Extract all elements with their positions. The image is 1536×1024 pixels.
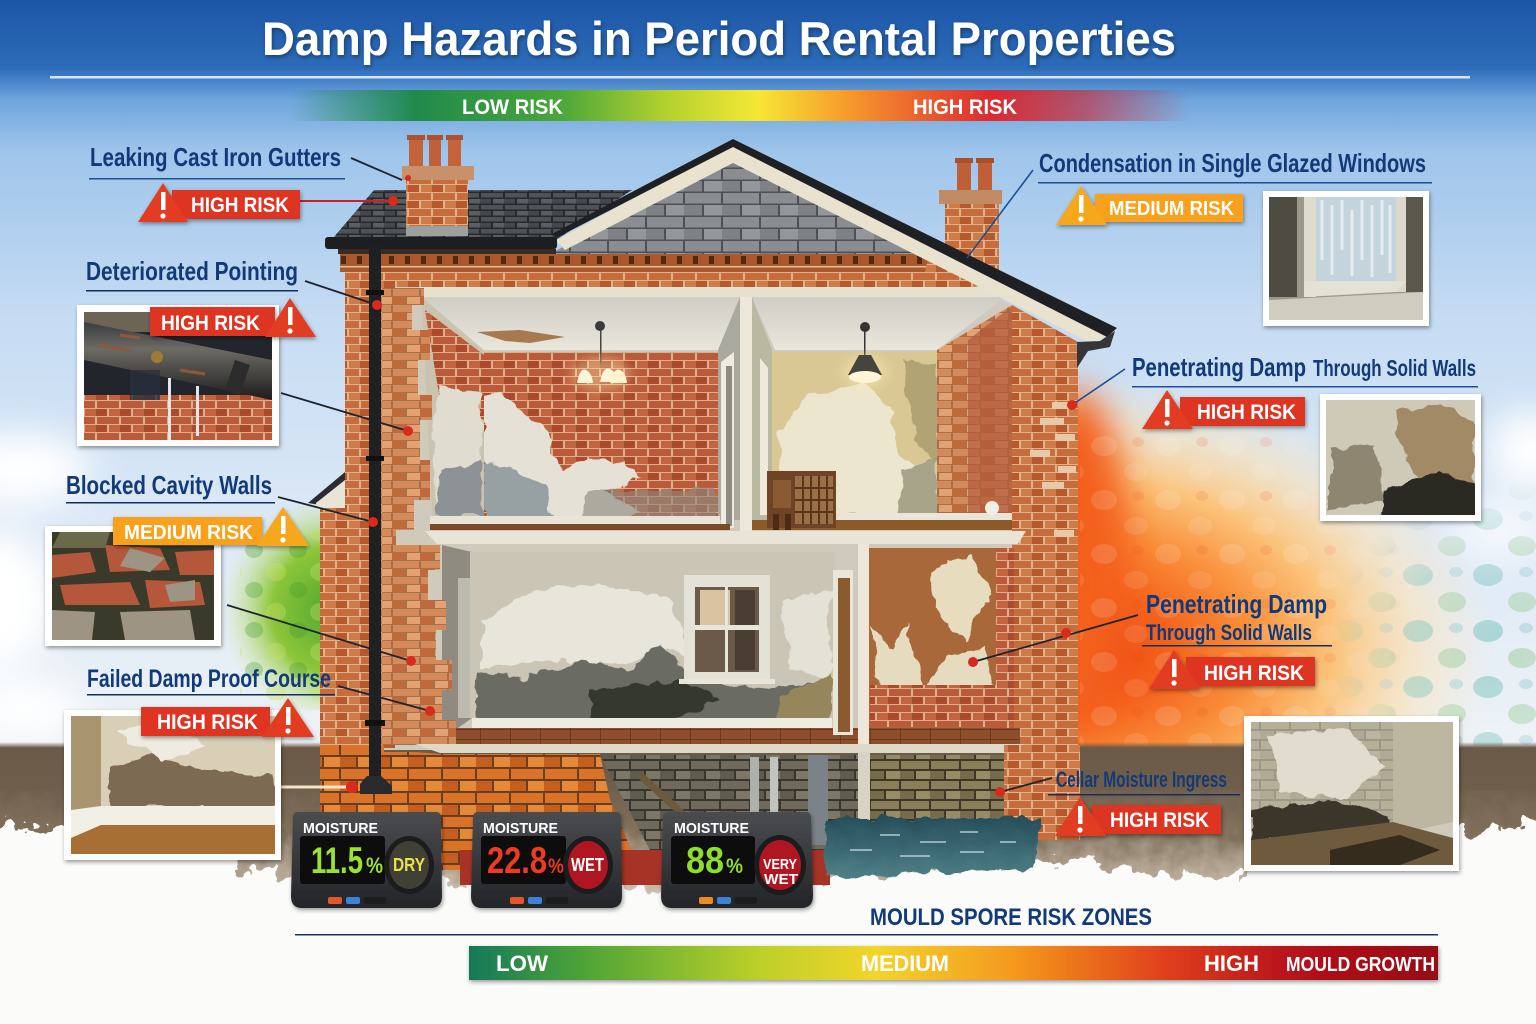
moisture meter: dry: DRY bbox=[393, 855, 425, 875]
badge: high risk penetrating lower: HIGH RISK bbox=[1204, 662, 1304, 685]
gable fascia bbox=[556, 145, 1106, 346]
brick frieze bbox=[345, 250, 990, 287]
photo: cellar corner bbox=[1244, 716, 1459, 871]
upper right room bbox=[752, 297, 1012, 530]
badge: high risk: HIGH RISK bbox=[191, 194, 289, 217]
moisture meter: very wet: VERY bbox=[763, 856, 797, 873]
door upper left bbox=[721, 352, 734, 528]
badge: high risk pointing bbox=[150, 298, 316, 337]
right chimney bbox=[939, 158, 1002, 272]
cellar bbox=[320, 745, 1080, 885]
gable slate bbox=[550, 155, 925, 254]
roof edge bbox=[552, 139, 1117, 337]
right exterior wall bbox=[1005, 305, 1078, 830]
badge: high risk pointing: HIGH RISK bbox=[161, 312, 260, 335]
moisture meter: dry: 11.5 bbox=[311, 840, 363, 881]
moisture meter: wet: 22.8 bbox=[487, 840, 547, 881]
label: condensation bbox=[1038, 148, 1432, 225]
moisture meter: very wet bbox=[661, 812, 813, 908]
label: leaking cast iron gutters bbox=[89, 142, 345, 222]
heading rule bbox=[295, 934, 1438, 936]
mould spore risk bar: HIGH bbox=[1204, 951, 1259, 976]
badge: high risk penetrating upper: HIGH RISK bbox=[1197, 401, 1296, 424]
upper lintel bbox=[420, 287, 998, 297]
badge: high risk cellar: HIGH RISK bbox=[1110, 809, 1209, 832]
title rule bbox=[50, 76, 1470, 78]
photo: cast iron pipe bbox=[77, 305, 279, 446]
moisture meter: very wet: MOISTURE bbox=[674, 820, 749, 837]
moisture meter: very wet: % bbox=[726, 855, 743, 878]
badge: high risk cellar bbox=[1055, 797, 1221, 836]
moisture meter: very wet: 88 bbox=[686, 840, 724, 881]
label: cellar moisture ingress bbox=[1048, 767, 1240, 836]
badge: medium risk condensation: MEDIUM RISK bbox=[1109, 198, 1235, 220]
moisture meter: very wet: WET bbox=[764, 871, 798, 888]
label: penetrating damp lower: Through Solid Walls bbox=[1146, 620, 1312, 645]
label: penetrating damp lower bbox=[1142, 589, 1332, 689]
left extension bbox=[308, 472, 360, 748]
upper left room bbox=[422, 297, 740, 530]
left slate roof bbox=[333, 190, 632, 240]
moisture meter: dry bbox=[291, 812, 442, 908]
photo: damaged plaster bbox=[1320, 394, 1481, 521]
label: cellar moisture ingress: Cellar Moisture Ingress bbox=[1056, 767, 1227, 792]
moisture meter: dry: % bbox=[366, 853, 383, 878]
badge: high risk damp proof: HIGH RISK bbox=[157, 711, 258, 734]
window bbox=[679, 575, 775, 684]
crumbling brick edge bbox=[382, 288, 456, 745]
mould spore risk bar: MEDIUM bbox=[861, 951, 949, 976]
right fascia tail bbox=[1077, 331, 1115, 368]
label: penetrating damp lower: Penetrating Damp bbox=[1146, 589, 1327, 619]
label: penetrating damp upper: Penetrating Damp bbox=[1132, 352, 1306, 382]
mould spore risk bar: LOW bbox=[496, 951, 548, 976]
label: leaking cast iron gutters: Leaking Cast Iron Gutters bbox=[90, 142, 341, 172]
background: sky bbox=[0, 0, 1536, 760]
top risk scale: LOW RISK bbox=[462, 96, 563, 119]
photo: damp room bbox=[64, 710, 281, 860]
badge: high risk damp proof bbox=[141, 698, 314, 737]
leader lines and dots bbox=[227, 158, 1138, 797]
moisture meter: wet: % bbox=[548, 855, 564, 878]
heat zone: right of house bbox=[1020, 380, 1536, 752]
label: failed damp proof course: Failed Damp Proof Course bbox=[87, 665, 331, 693]
wooden chair bbox=[767, 471, 836, 530]
photo: window condensation bbox=[1263, 191, 1429, 326]
moisture meter: wet bbox=[471, 812, 622, 908]
badge: medium risk condensation bbox=[1056, 186, 1243, 225]
badge: high risk penetrating lower bbox=[1149, 650, 1315, 689]
moisture meter: dry: MOISTURE bbox=[303, 820, 378, 837]
downpipe bbox=[360, 246, 392, 794]
lower slab bbox=[415, 744, 1024, 753]
mould spore risk bar bbox=[469, 946, 1438, 980]
moisture meter: wet: WET bbox=[571, 855, 604, 875]
label: penetrating damp upper: Through Solid Walls bbox=[1313, 355, 1476, 381]
moisture meter: wet: MOISTURE bbox=[483, 820, 558, 837]
left chimney bbox=[402, 135, 474, 236]
title: Damp Hazards in Period Rental Properties bbox=[262, 12, 1176, 65]
badge: medium risk cavity: MEDIUM RISK bbox=[124, 522, 254, 544]
house cutaway bbox=[308, 135, 1117, 885]
label: blocked cavity walls: Blocked Cavity Walls bbox=[66, 470, 272, 500]
label: deteriorated pointing: Deteriorated Pointing bbox=[86, 256, 298, 286]
pendant lamp bbox=[841, 322, 889, 390]
top risk scale bbox=[290, 90, 1190, 121]
photo: stone wall bbox=[45, 526, 221, 646]
door lower bbox=[833, 570, 853, 735]
badge: high risk bbox=[138, 183, 300, 222]
left exterior wall bbox=[345, 285, 395, 748]
central post lower bbox=[858, 544, 869, 752]
dentil band bbox=[340, 254, 930, 272]
badge: medium risk cavity bbox=[113, 507, 309, 546]
mould spore heading: MOULD SPORE RISK ZONES bbox=[870, 904, 1152, 931]
right wall damaged bricks bbox=[1030, 402, 1076, 537]
chandelier bbox=[571, 321, 631, 392]
clouds bbox=[0, 412, 1536, 740]
lower left room bbox=[442, 545, 858, 746]
top risk scale: HIGH RISK bbox=[913, 96, 1017, 119]
label: penetrating damp upper bbox=[1132, 352, 1478, 429]
page base white bbox=[0, 745, 1536, 1024]
ground band bbox=[0, 742, 1536, 890]
gutter bbox=[325, 237, 557, 249]
house interior base bbox=[345, 285, 1078, 750]
mould spore risk bar: MOULD GROWTH bbox=[1286, 954, 1435, 976]
label: condensation: Condensation in Single Glazed Windows bbox=[1039, 148, 1426, 178]
green zone: left of house bbox=[222, 505, 322, 710]
central post upper bbox=[740, 297, 752, 532]
badge: high risk penetrating upper bbox=[1142, 390, 1305, 429]
lower right room bbox=[869, 548, 1020, 744]
floor slab bbox=[425, 531, 1026, 544]
